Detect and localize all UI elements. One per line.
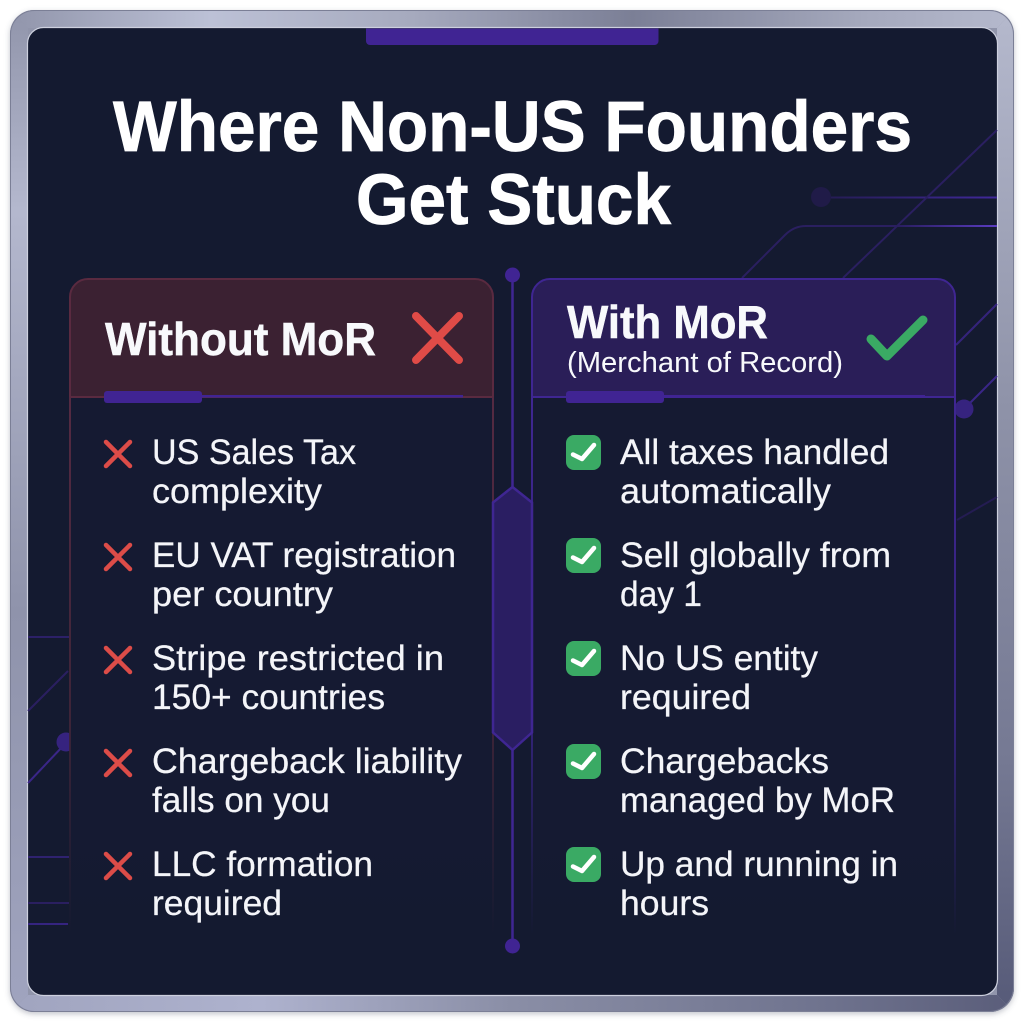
item: sell globally: day 1 [620,575,702,614]
header: with MoR: (Merchant of Record) [567,347,843,379]
item: chargebacks: Chargebacks [620,742,829,781]
header: with MoR [532,279,955,397]
item: all taxes: automatically [620,472,832,511]
item: LLC formation: required [152,884,282,923]
item: no US entity: required [620,678,751,717]
title: Get Stuck [356,161,671,240]
item: LLC formation: LLC formation [152,845,373,884]
header divider [566,391,925,403]
header: with MoR: With MoR [567,296,768,348]
title: Where Non-US Founders [113,88,912,167]
item: sell globally [566,536,891,614]
item: chargebacks: managed by MoR [620,781,895,820]
item: sell globally: Sell globally from [620,536,891,575]
header: without MoR [70,279,493,397]
item: LLC formation [106,845,373,923]
item: Stripe [106,639,444,717]
item: US Sales Tax [106,433,356,511]
item: all taxes [566,433,889,511]
top tab [366,28,658,45]
decorative circuit background, right [742,130,997,520]
item: up and running [566,845,898,923]
item: EU VAT: per country [152,575,334,614]
item: Chargeback liability: Chargeback liability [152,742,463,781]
item: Stripe: Stripe restricted in [152,639,444,678]
item: chargebacks [566,742,895,820]
item: Chargeback liability: falls on you [152,781,330,820]
header divider [104,391,463,403]
item: EU VAT [106,536,456,614]
item: no US entity: No US entity [620,639,818,678]
center divider with hexagon [493,268,532,954]
item: up and running: Up and running in [620,845,898,884]
item: EU VAT: EU VAT registration [152,536,456,575]
panel: without MoR [70,279,494,935]
header: without MoR: Without MoR [105,313,376,365]
item: Chargeback liability [106,742,463,820]
panel: with MoR [532,279,956,935]
decorative circuit background, left [28,637,76,924]
item: all taxes: All taxes handled [620,433,889,472]
item: US Sales Tax: complexity [152,472,323,511]
item: no US entity [566,639,818,717]
item: US Sales Tax: US Sales Tax [152,433,356,472]
title [113,88,912,240]
item: Stripe: 150+ countries [152,678,385,717]
item: up and running: hours [620,884,709,923]
